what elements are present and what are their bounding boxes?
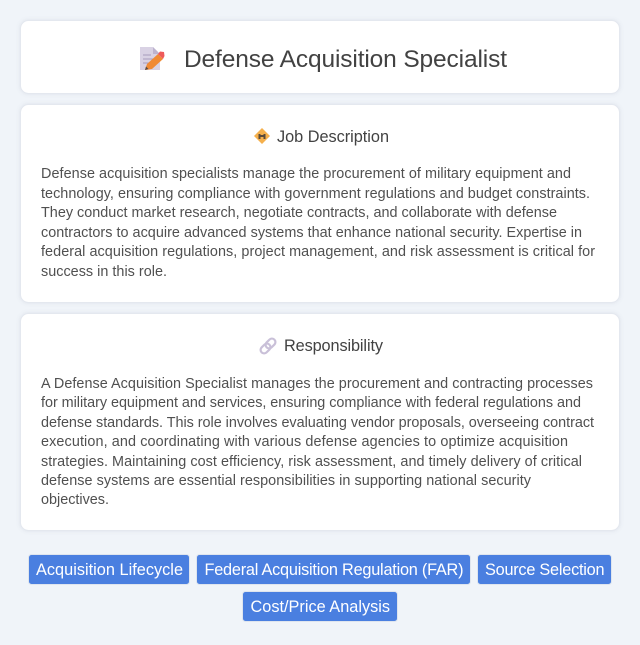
tag: acquisition lifecycle: [28, 554, 190, 584]
text block: responsibility: execution, and coordinating with various defense agencies to optimize acquisition: [41, 434, 568, 450]
text block: responsibility: [41, 376, 594, 508]
text block: job description: success in this role.: [41, 264, 167, 280]
text block: job description: federal acquisition regulations, project management, and risk assessment is critical for: [41, 244, 595, 260]
tag: cost/price analysis: Cost/Price Analysis: [250, 598, 390, 616]
text block: job description: They conduct market research, negotiate contracts, and collaborate with defense: [41, 205, 557, 221]
text block: responsibility: defense systems are essential responsibilities in supporting national security: [41, 473, 532, 489]
tag: source selection: Source Selection: [485, 561, 604, 579]
text block: responsibility: objectives.: [41, 492, 109, 508]
text block: job description: Defense acquisition specialists manage the procurement of military equipment and: [41, 166, 571, 182]
text block: job description: contractors to acquire advanced systems that enhance national security. Expertise in: [41, 225, 582, 241]
text block: job description: [41, 166, 595, 280]
text block: responsibility: defense standards. This role involves evaluating vendor proposals, overseeing contract: [41, 415, 594, 431]
tags: [28, 554, 612, 622]
heading: responsibility: Responsibility: [284, 337, 384, 355]
panel: title header: [20, 20, 620, 94]
tag: cost/price analysis: [242, 592, 398, 622]
icon: orange diamond: [254, 128, 270, 144]
icon: document with pencil: [140, 47, 164, 70]
text block: job description: technology, ensuring compliance with government regulations and budget constraints.: [41, 186, 590, 202]
icon: chain link: [259, 337, 277, 355]
text block: responsibility: for military equipment and services, ensuring compliance with federal regulations and: [41, 395, 581, 411]
text block: responsibility: strategies. Maintaining cost efficiency, risk assessment, and timely delivery of critical: [41, 454, 582, 470]
tag: source selection: [478, 554, 612, 584]
heading: job description: Job Description: [277, 128, 389, 146]
tag: federal acquisition regulation: Federal Acquisition Regulation (FAR): [204, 561, 464, 579]
panel: responsibility: [20, 314, 620, 530]
tag: acquisition lifecycle: Acquisition Lifecycle: [36, 561, 183, 579]
panel: job description: [20, 104, 620, 302]
text block: responsibility: A Defense Acquisition Specialist manages the procurement and contracting processes: [41, 376, 593, 392]
tag: federal acquisition regulation: [196, 554, 470, 584]
title: Defense Acquisition Specialist: [184, 46, 507, 73]
